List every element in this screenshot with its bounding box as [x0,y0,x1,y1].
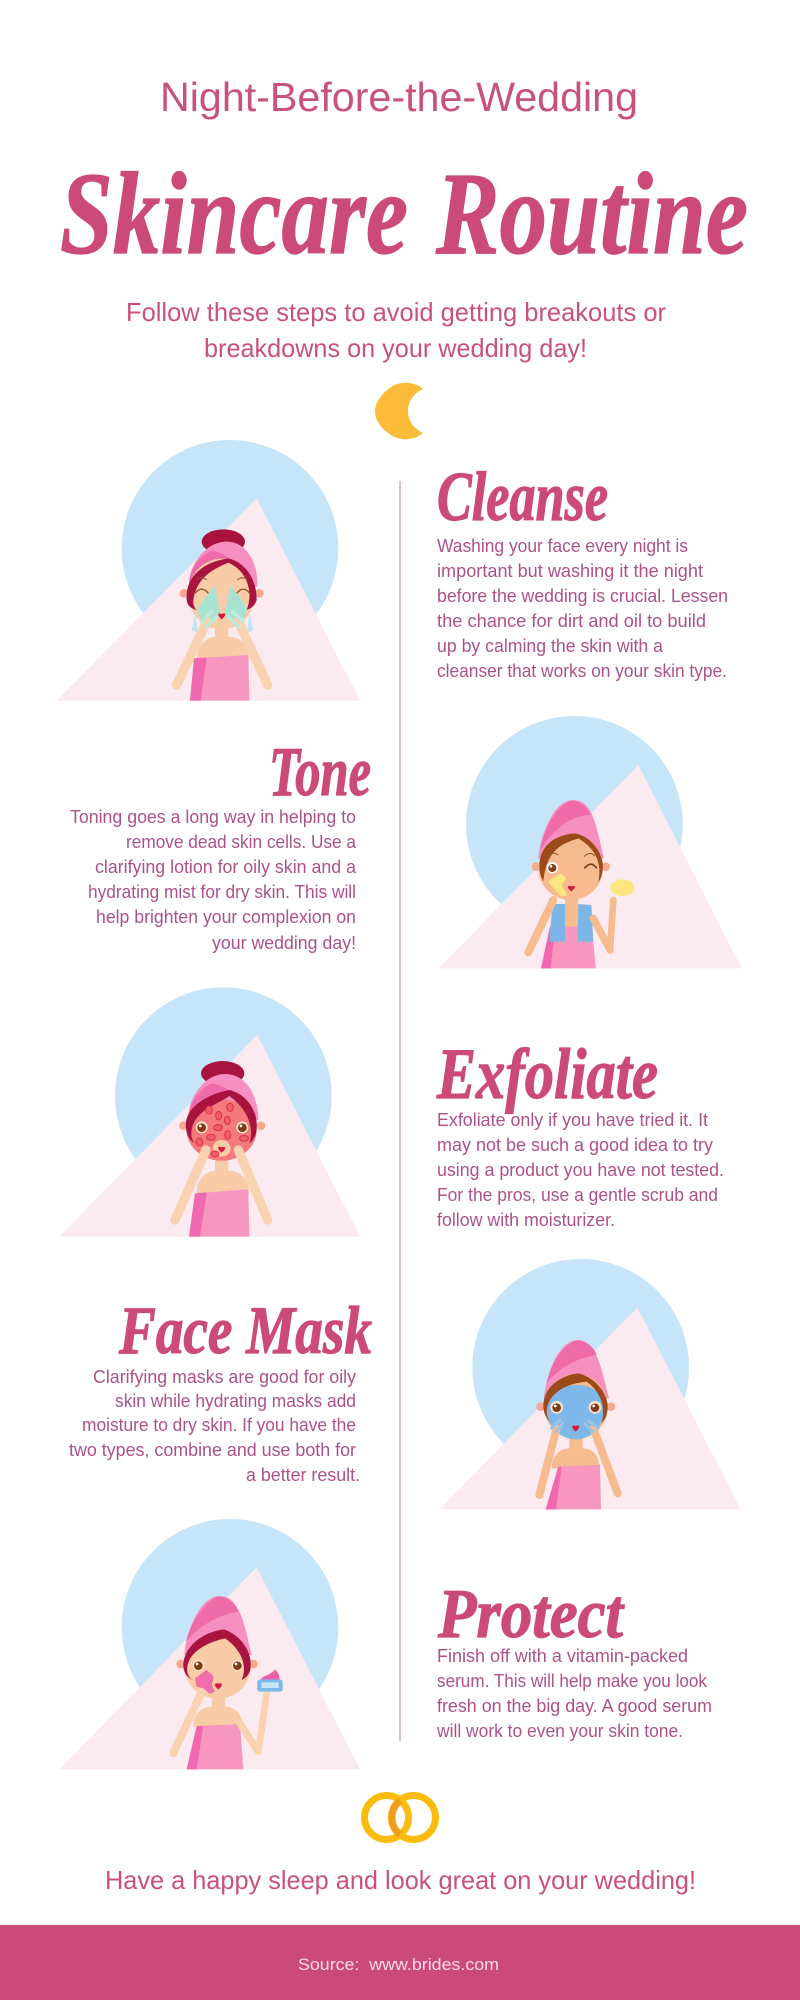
body text: protect: fresh on the big day. A good serum [437,1695,712,1716]
body text: cleanse: Washing your face every night is [437,535,688,556]
body text: tone: Toning goes a long way in helping to [70,806,356,827]
body text: cleanse: before the wedding is crucial. Lessen [437,585,728,606]
title: Skincare Routine: Skincare [60,148,408,279]
source text: Source: www.brides.com [298,1955,499,1974]
body text: face mask: Clarifying masks are good for oily [93,1366,357,1387]
body text: exfoliate: using a product you have not tested. [437,1159,724,1180]
figure: woman toning with sponge [528,800,634,968]
body text: tone: your wedding day! [212,932,356,953]
body text: exfoliate: For the pros, use a gentle scrub and [437,1184,718,1205]
intro text: breakdowns on your wedding day! [204,333,587,363]
icon: wedding rings [364,1796,436,1840]
intro text: Follow these steps to avoid getting breakouts or [126,297,666,327]
body text: protect [436,1645,712,1741]
panel: face mask illustration [439,1259,741,1509]
center divider line [399,481,401,1741]
body text: tone: clarifying lotion for oily skin and a [95,856,357,877]
title: Night-Before-the-Wedding: Night-Before-the-Wedding [160,74,638,120]
panel: face mask text [69,1292,372,1485]
body text: cleanse: the chance for dirt and oil to build [437,610,706,631]
body text: protect: serum. This will help make you look [437,1670,708,1691]
intro text [126,297,666,363]
panel: tone text [70,734,371,953]
body text: face mask: a better result. [246,1464,360,1485]
title: Skincare Routine [60,148,748,279]
panel: cleanse illustration [57,440,360,701]
figure: woman with strawberry scrub [175,1061,268,1237]
body text: exfoliate: follow with moisturizer. [437,1209,615,1230]
figure: woman with blue face mask [536,1340,618,1509]
panel: exfoliate text [436,1034,724,1230]
heading: Protect: Protect [437,1576,625,1653]
body text: face mask [69,1366,360,1485]
body text: face mask: moisture to dry skin. If you have the [82,1414,356,1435]
figure: woman washing face [177,529,268,701]
body text: protect: will work to even your skin tone. [436,1720,683,1741]
body text: exfoliate: Exfoliate only if you have tried it. It [437,1109,708,1130]
heading: Tone: Tone [269,734,371,811]
figure: woman applying serum with jar [173,1596,283,1769]
panel: cleanse text [437,459,728,681]
heading: Exfoliate: Exfoliate [436,1034,658,1114]
body text: tone [70,806,357,953]
body text: cleanse: up by calming the skin with a [437,635,664,656]
panel: tone illustration [438,716,742,968]
body text: exfoliate: may not be such a good idea to try [437,1134,714,1155]
body text: tone: remove dead skin cells. Use a [126,831,357,852]
body text: face mask: two types, combine and use both for [69,1439,356,1460]
body text: cleanse: important but washing it the night [437,560,703,581]
footer bar [0,1925,800,2000]
body text: cleanse [437,535,728,681]
heading: Face Mask: Face Mask [118,1292,372,1368]
icon: crescent moon [375,383,423,439]
body text: face mask: skin while hydrating masks add [115,1390,356,1411]
panel: protect illustration [59,1519,360,1769]
body text: cleanse: cleanser that works on your skin type. [437,660,727,681]
body text: protect: Finish off with a vitamin-packed [437,1645,688,1666]
heading: Cleanse: Cleanse [437,459,608,536]
body text: tone: help brighten your complexion on [96,906,356,927]
body text: tone: hydrating mist for dry skin. This will [88,881,356,902]
body text: exfoliate [437,1109,724,1230]
closing message: Have a happy sleep and look great on your wedding! [105,1865,696,1895]
panel: exfoliate illustration [59,987,360,1237]
panel: protect text [436,1576,712,1741]
